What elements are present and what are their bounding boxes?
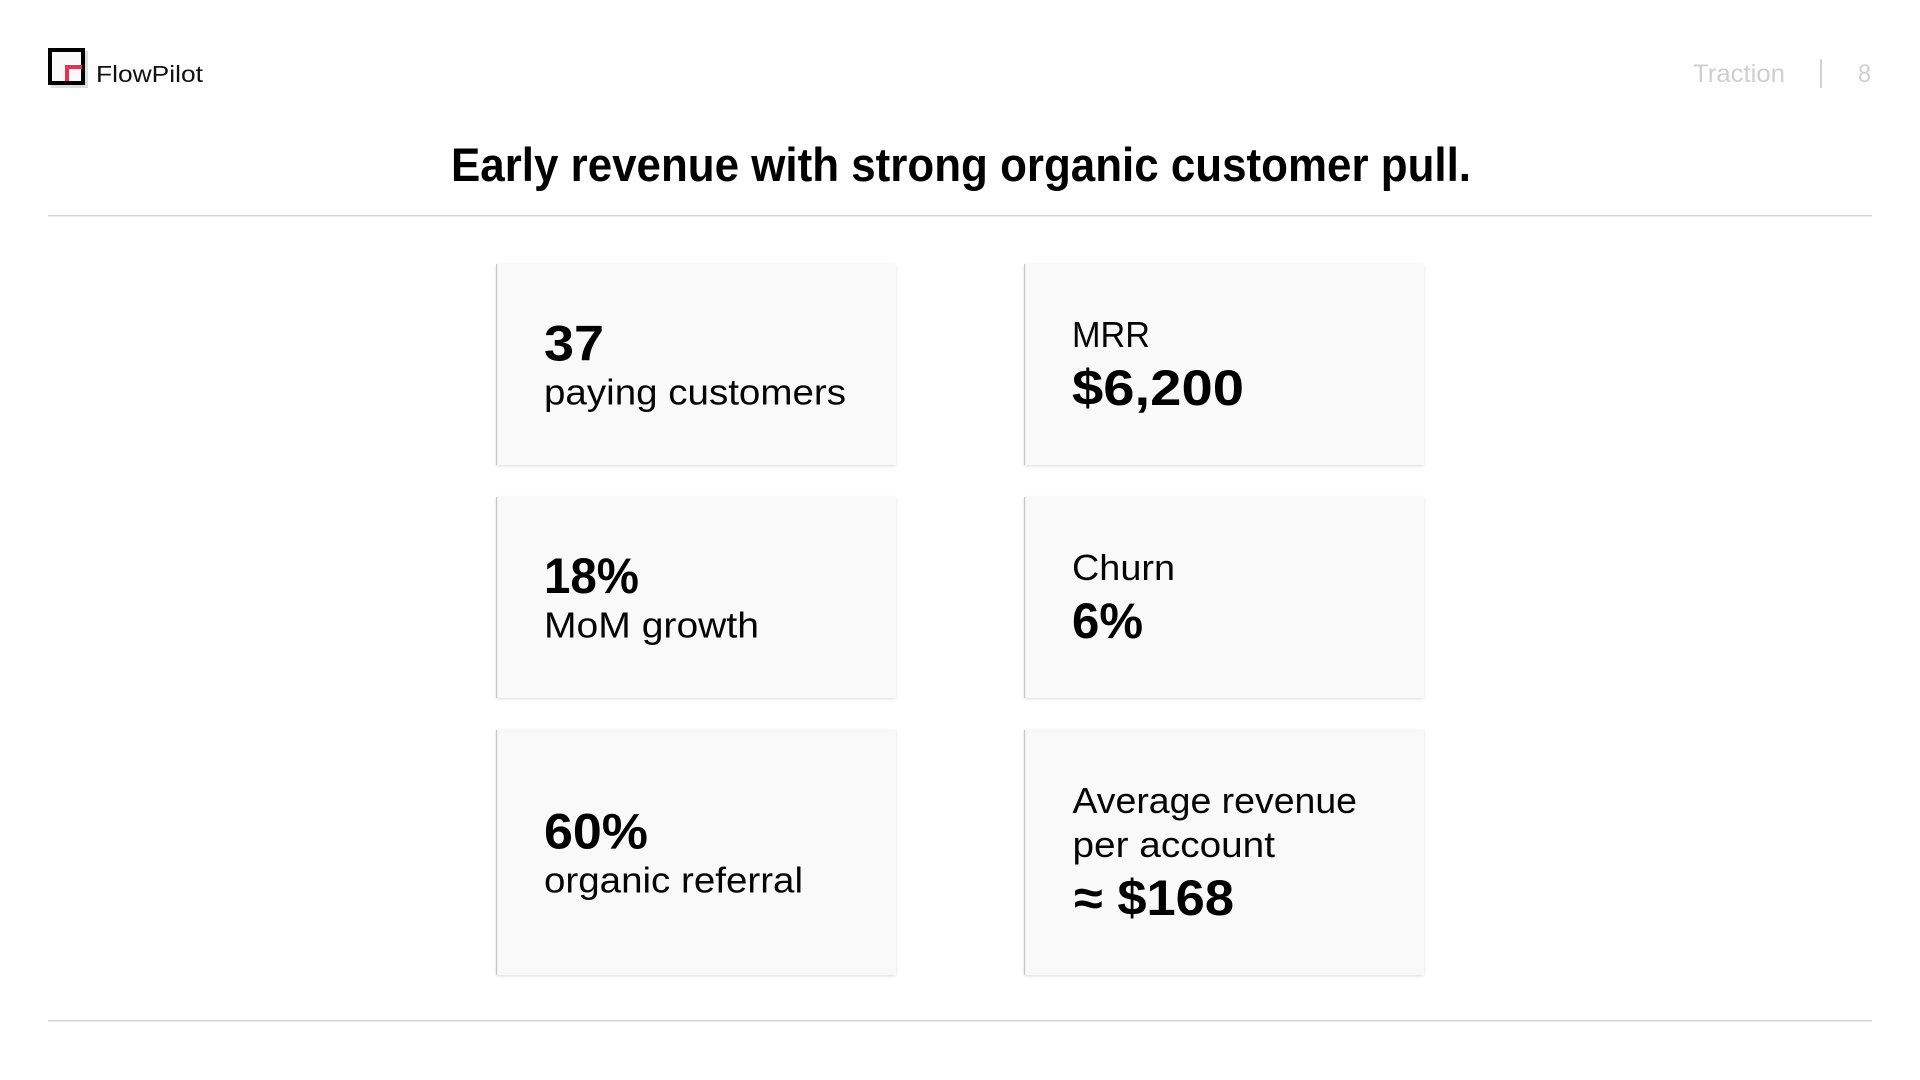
page number: 8 — [1858, 60, 1871, 88]
card: average revenue per account: Average revenue — [1072, 780, 1357, 821]
card: paying customers — [496, 264, 896, 465]
card: churn — [1024, 497, 1424, 698]
card: organic referral: 60% — [544, 804, 648, 860]
logo: FlowPilot — [50, 50, 204, 88]
card: MRR: $6,200 — [1072, 360, 1244, 416]
card: paying customers: 37 — [544, 316, 604, 372]
card: organic referral — [496, 730, 896, 975]
section label: Traction — [1693, 60, 1785, 88]
title: Early revenue with strong organic customer pull. — [451, 138, 1471, 191]
card: churn: 6% — [1072, 593, 1143, 649]
card: MoM growth — [496, 497, 896, 698]
card: average revenue per account — [1024, 730, 1424, 975]
card: MoM growth: MoM growth — [544, 604, 759, 646]
card: MRR — [1024, 264, 1424, 465]
card: MRR: MRR — [1072, 314, 1150, 355]
card: churn: Churn — [1072, 547, 1175, 588]
logo wordmark: FlowPilot — [96, 61, 204, 87]
card: organic referral: organic referral — [544, 860, 803, 900]
card: average revenue per account: ≈ $168 — [1074, 870, 1234, 926]
card: MoM growth: 18% — [544, 548, 639, 604]
card: paying customers: paying customers — [544, 372, 846, 412]
card: average revenue per account: per account — [1072, 824, 1275, 865]
icon: logo mark — [50, 50, 88, 88]
